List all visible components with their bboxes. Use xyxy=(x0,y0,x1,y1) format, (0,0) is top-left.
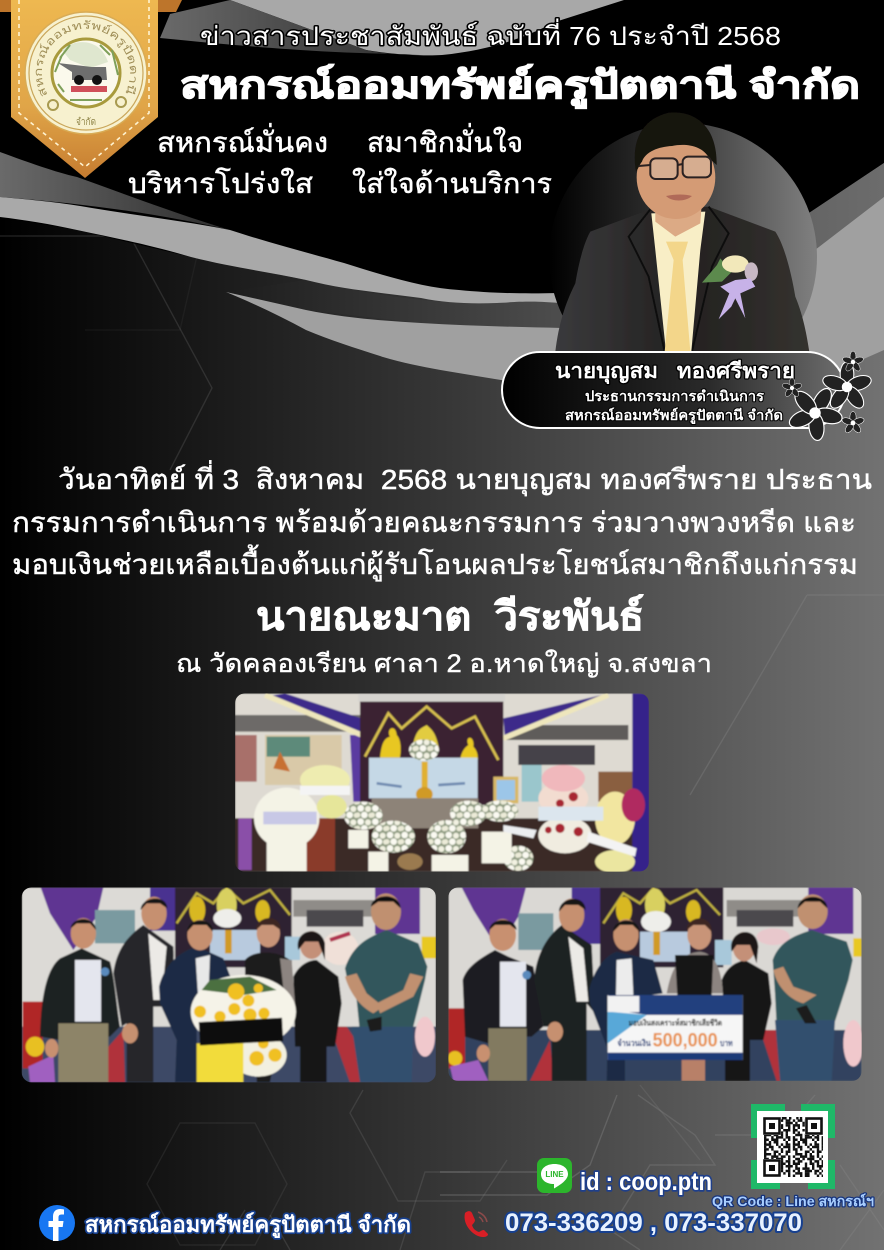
logo: จำกัด xyxy=(76,117,96,128)
person 3 xyxy=(589,952,663,1081)
cheque board xyxy=(608,995,743,1060)
person 2 xyxy=(113,925,174,1082)
photo: group with wreath xyxy=(22,887,436,1083)
suit jacket xyxy=(555,207,809,352)
person 5 xyxy=(293,960,342,1082)
icon: LINE: LINE xyxy=(545,1170,564,1179)
top dark gray wave xyxy=(160,0,420,54)
main title: สหกรณ์ออมทรัพย์ครูปัตตานี จำกัด xyxy=(180,64,860,109)
chairman name: นายบุญสม ทองศรีพราย xyxy=(555,359,795,385)
backdrop xyxy=(175,887,292,967)
slogan block: สมาชิกมั่นใจ xyxy=(367,123,523,158)
photo: funeral altar xyxy=(235,693,649,873)
person 6 xyxy=(773,930,853,1027)
name plate xyxy=(502,352,845,428)
curtains xyxy=(272,693,361,732)
corsage xyxy=(702,255,758,319)
green corner brackets xyxy=(751,1104,835,1189)
body paragraph: วันอาทิตย์ ที่ 3 สิงหาคม 2568 นายบุญสม ทองศรีพราย ประธาน xyxy=(58,460,872,497)
dark gray left wave xyxy=(0,152,230,230)
light gray swoosh band xyxy=(0,197,560,303)
body paragraph: กรรมการดำเนินการ พร้อมด้วยคณะกรรมการ ร่วมวางพวงหรีด และ xyxy=(12,507,856,538)
slogan block: สหกรณ์มั่นคง xyxy=(157,123,328,158)
LINE id: id : coop.ptn xyxy=(580,1168,712,1196)
slogan block: บริหารโปร่งใส xyxy=(128,167,313,199)
flowers xyxy=(344,739,533,871)
QR caption: QR Code : Line สหกรณ์ฯ xyxy=(712,1193,874,1209)
person 4 xyxy=(667,952,723,993)
backdrop xyxy=(600,887,723,967)
head xyxy=(637,136,715,219)
person 3 xyxy=(159,947,232,1082)
altar backdrop xyxy=(360,698,503,805)
curtains xyxy=(41,887,103,950)
cheque board: จำนวนเงิน xyxy=(617,1038,651,1048)
icon: plumeria flowers xyxy=(777,351,873,450)
badge ribbon with logo xyxy=(11,0,158,178)
icon: LINE xyxy=(537,1158,572,1193)
ribbon top tab xyxy=(0,0,182,12)
light gray right swoosh xyxy=(226,197,884,398)
deceased member name: นายณะมาต วีระพันธ์ xyxy=(256,594,644,639)
neck xyxy=(655,200,702,237)
person 5 xyxy=(722,960,772,1081)
Facebook page name: สหกรณ์ออมทรัพย์ครูปัตตานี จำกัด xyxy=(85,1212,411,1239)
portrait: chairman xyxy=(555,112,809,352)
QR code xyxy=(751,1104,835,1189)
hair xyxy=(635,112,717,172)
wreath xyxy=(189,974,298,1036)
venue line: ณ วัดคลองเรียน ศาลา 2 อ.หาดใหญ่ จ.สงขลา xyxy=(176,649,712,678)
chairman position: ประธานกรรมการดำเนินการ xyxy=(585,388,764,404)
person 1 xyxy=(462,949,544,1044)
buddha statues xyxy=(380,728,401,758)
cheque board: บาท xyxy=(720,1038,733,1048)
logo xyxy=(24,11,148,135)
photo: group with donation cheque xyxy=(448,887,863,1081)
icon: phone xyxy=(465,1211,488,1237)
cheque board: มอบเงินสงเคราะห์สมาชิกเสียชีวิต xyxy=(629,1017,722,1027)
cheque board: 500,000 xyxy=(653,1031,718,1052)
top light gray wave xyxy=(230,0,624,55)
curtains xyxy=(461,887,527,936)
body paragraph xyxy=(12,460,872,582)
header black area xyxy=(0,0,884,303)
person 6 xyxy=(345,930,427,1033)
person 1 xyxy=(39,948,121,1040)
left flowers xyxy=(23,1002,43,1068)
lapels xyxy=(629,207,729,352)
glasses xyxy=(639,157,711,179)
portrait backing circle xyxy=(549,123,817,391)
shirt xyxy=(651,212,705,352)
tie xyxy=(665,242,690,352)
mouth xyxy=(666,194,692,200)
phone numbers: 073-336209 , 073-337070 xyxy=(505,1209,802,1237)
slogan block: ใส่ใจด้านบริการ xyxy=(352,167,552,199)
coffin xyxy=(369,758,478,798)
header issue line: ข่าวสารประชาสัมพันธ์ ฉบับที่ 76 ประจำปี 2568 xyxy=(200,18,781,51)
person 2 xyxy=(534,925,595,1081)
icon: Facebook xyxy=(39,1205,75,1241)
portrait frame xyxy=(493,777,518,803)
body paragraph: มอบเงินช่วยเหลือเบื้องต้นแก่ผู้รับโอนผลประโยชน์สมาชิกถึงแก่กรรม xyxy=(12,544,858,582)
altar signs xyxy=(300,786,350,795)
logo: สหกรณ์ออมทรัพย์ครูปัตตานี xyxy=(36,20,136,96)
dark gray lower swoosh xyxy=(226,163,884,335)
person 4 xyxy=(245,952,295,1082)
organisation: สหกรณ์ออมทรัพย์ครูปัตตานี จำกัด xyxy=(565,407,783,424)
slogan block xyxy=(128,123,552,199)
